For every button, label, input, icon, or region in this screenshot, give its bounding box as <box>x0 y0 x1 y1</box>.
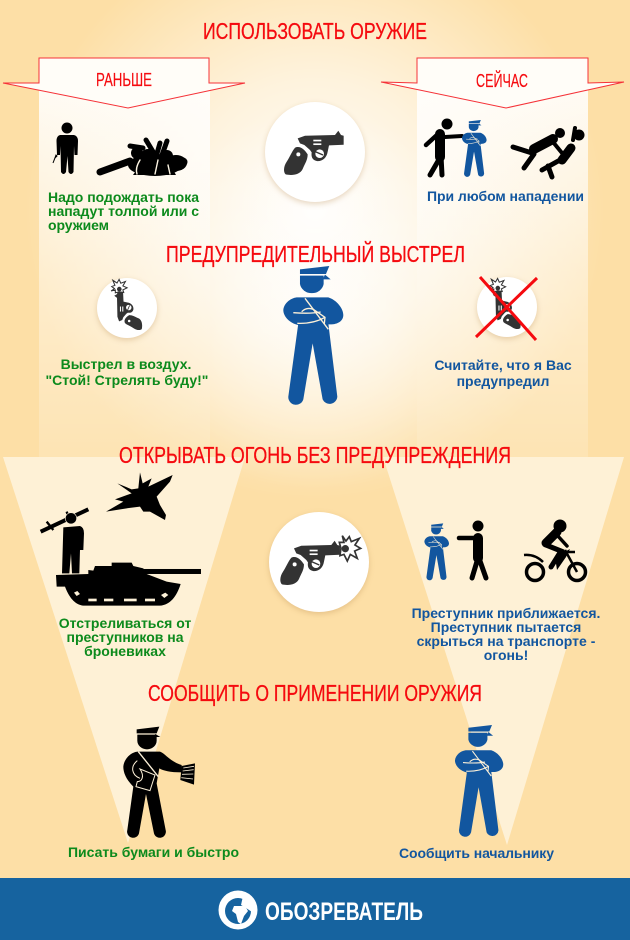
title: open fire: ОТКРЫВАТЬ ОГОНЬ БЕЗ ПРЕДУПРЕЖДЕНИЯ <box>119 442 511 468</box>
label: now: СЕЙЧАС <box>476 70 528 91</box>
panel: before column <box>39 82 210 457</box>
icon: officer with papers <box>123 727 195 838</box>
arrow: before <box>3 58 245 108</box>
panel: centre glow <box>210 110 417 500</box>
text: criminal approaching: скрыться на транспорте - <box>417 633 596 649</box>
title: use weapon: ИСПОЛЬЗОВАТЬ ОРУЖИЕ <box>203 18 427 44</box>
text: before wait: Надо подождать пока <box>48 189 199 205</box>
text: any attack: При любом нападении <box>427 188 584 204</box>
panel: now column <box>417 82 588 457</box>
text: criminal approaching: огонь! <box>484 647 528 663</box>
icon: shot in the air <box>97 278 157 340</box>
arrow: now <box>381 58 624 108</box>
icon: man with launcher on tank <box>41 509 201 606</box>
icon: officer facing criminal <box>424 520 486 580</box>
text: criminal approaching: Преступник пытается <box>431 619 581 635</box>
icon: two people fighting <box>513 128 584 177</box>
text: before wait: нападут толпой или с <box>48 203 199 219</box>
figure: officer reporting <box>455 725 503 837</box>
paper sheet <box>180 763 195 785</box>
tank <box>56 563 201 606</box>
icon: man with knife <box>53 122 78 174</box>
text: shot in the air: Выстрел в воздух. <box>61 356 191 372</box>
label: before: РАНЬШЕ <box>96 70 152 90</box>
text: consider warned: Считайте, что я Вас <box>434 357 572 373</box>
title: report: СООБЩИТЬ О ПРИМЕНЕНИИ ОРУЖИЯ <box>148 680 482 706</box>
footer <box>0 878 630 940</box>
panel: right lower arrow <box>383 457 624 845</box>
icon: crossed-out shot <box>476 277 537 340</box>
icon: attacker and officer <box>426 118 487 177</box>
text: paperwork: Писать бумаги и быстро <box>68 844 239 860</box>
icon: revolver firing circle <box>269 512 369 614</box>
panel: left lower arrow <box>3 457 245 843</box>
icon: fighter jet <box>106 472 173 520</box>
text: fire back: броневиках <box>84 643 166 659</box>
text: tell the boss: Сообщить начальнику <box>399 845 554 861</box>
text: shot in the air: "Стой! Стрелять буду!" <box>46 372 208 388</box>
text: fire back: преступников на <box>66 629 184 645</box>
title: warning shot: ПРЕДУПРЕДИТЕЛЬНЫЙ ВЫСТРЕЛ <box>166 240 465 267</box>
logo: wordmark: ОБОЗРЕВАТЕЛЬ <box>265 898 423 926</box>
figure: large officer <box>283 266 343 405</box>
icon: revolver circle <box>265 102 365 204</box>
text: fire back: Отстреливаться от <box>59 615 191 631</box>
icon: pile of people <box>100 140 188 176</box>
text: before wait: оружием <box>48 217 109 233</box>
text: criminal approaching: Преступник приближается. <box>412 605 600 621</box>
icon: motorcyclist <box>524 520 586 580</box>
text: consider warned: предупредил <box>457 373 549 389</box>
logo: globe <box>218 890 258 930</box>
